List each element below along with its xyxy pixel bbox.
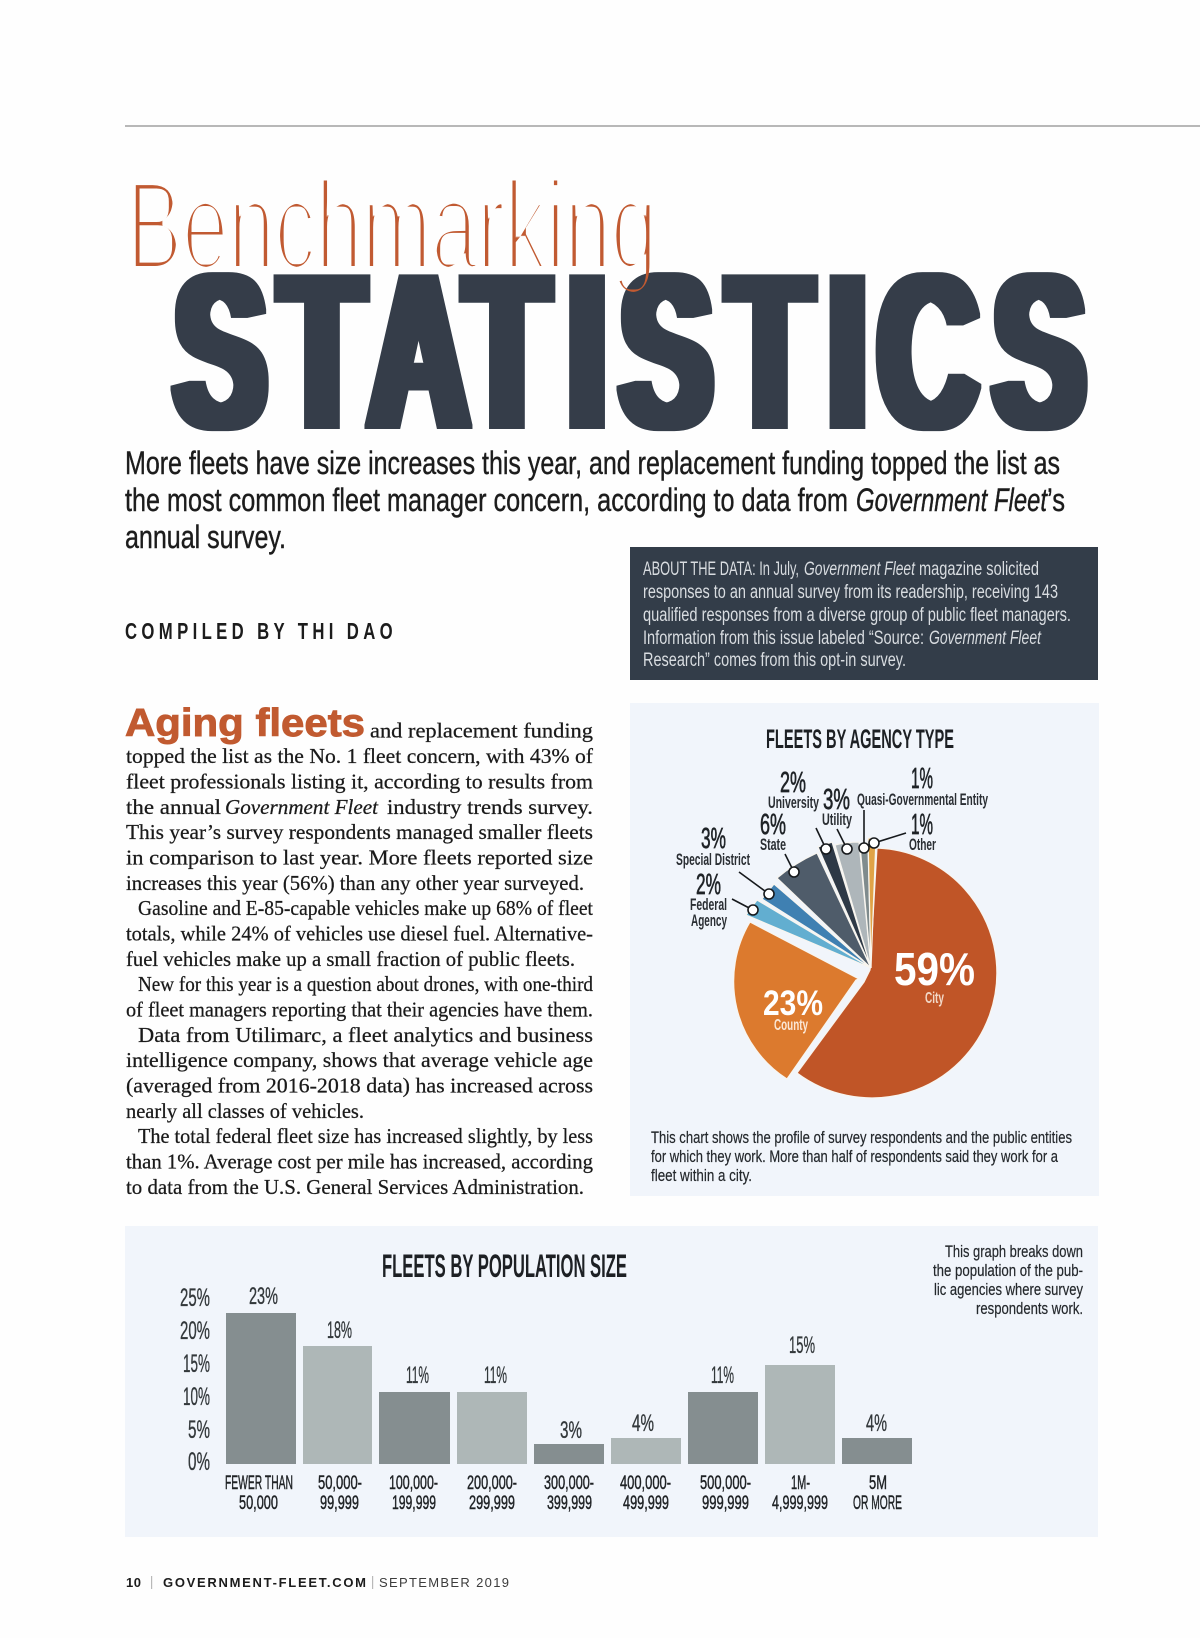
bar category labels: 1M- — [791, 1473, 810, 1494]
panel: about the data: Research” comes from this opt-in survey. — [643, 650, 906, 671]
byline: COMPILED BY THI DAO — [125, 618, 397, 644]
article text: Aging fleets: totals, while 24% of vehicles use diesel fuel. Alternative- — [126, 922, 593, 946]
intro paragraph: the most common fleet manager concern, according to data from — [125, 482, 848, 518]
label: university: University — [768, 793, 819, 812]
label: county 23%: 23% — [763, 984, 823, 1023]
label: county 23%: County — [774, 1017, 808, 1034]
y axis labels: 15% — [183, 1350, 210, 1378]
article text: Aging fleets: fleet professionals listing it, according to results from — [126, 770, 593, 794]
intro paragraph: ’s — [1047, 482, 1065, 518]
chart note — [933, 1242, 1083, 1318]
panel: about the data: Government Fleet — [804, 559, 916, 580]
label: utility: 3% — [823, 784, 850, 816]
article text: Aging fleets: and replacement funding — [370, 718, 593, 742]
bar category labels: 50,000 — [239, 1493, 278, 1514]
article text: Aging fleets: The total federal fleet size has increased slightly, by less — [138, 1124, 593, 1148]
bar value labels: 3% — [560, 1417, 582, 1444]
label: university: 2% — [780, 767, 806, 799]
panel: about the data: responses to an annual survey from its readership, receiving 143 — [643, 582, 1058, 603]
chart note: the population of the pub- — [933, 1261, 1083, 1280]
article text: Aging fleets: Government Fleet — [225, 795, 379, 819]
lead-in: Aging fleets: Aging fleets — [125, 702, 365, 745]
label: federal agency: Federal — [690, 895, 727, 914]
bar category labels: 199,999 — [392, 1493, 436, 1514]
bar category labels: FEWER THAN — [225, 1473, 293, 1494]
label: other — [909, 809, 936, 854]
label: quasi-governmental entity: 1% — [911, 763, 933, 795]
bar category labels: 399,999 — [547, 1493, 592, 1514]
label: city 59%: City — [925, 990, 944, 1007]
heading: STATISTICS: STATISTICS — [174, 229, 1085, 474]
intro paragraph — [125, 445, 1065, 555]
article text: Aging fleets: Gasoline and E-85-capable vehicles make up 68% of fleet — [138, 896, 593, 920]
article text: Aging fleets: to data from the U.S. General Services Administration. — [126, 1175, 584, 1199]
heading: Benchmarking: Benchmarking — [127, 155, 657, 296]
label: federal agency: 2% — [696, 869, 721, 901]
bar category labels: 400,000- — [620, 1473, 671, 1494]
footer — [126, 1575, 509, 1590]
bar category labels: 5M — [869, 1473, 887, 1494]
label: other: 1% — [911, 809, 933, 841]
panel: about the data: magazine solicited — [919, 559, 1039, 580]
bar category labels: 999,999 — [702, 1493, 749, 1514]
chart caption — [651, 1128, 1072, 1185]
y axis labels: 25% — [180, 1284, 210, 1312]
article text: Aging fleets: of fleet managers reporting that their agencies have them. — [126, 998, 593, 1022]
label: state: State — [760, 835, 786, 854]
bar value labels: 4% — [866, 1410, 887, 1437]
bar category labels: 200,000- — [467, 1473, 517, 1494]
y axis labels: 10% — [183, 1383, 210, 1411]
chart note: This graph breaks down — [945, 1242, 1083, 1261]
label: other: Other — [909, 835, 936, 854]
chart note: respondents work. — [976, 1299, 1083, 1318]
label: university — [768, 767, 819, 812]
article text: Aging fleets: in comparison to last year. More fleets reported size — [126, 846, 593, 870]
bar value labels: 18% — [327, 1317, 352, 1344]
article text: Aging fleets: fuel vehicles make up a small fraction of public fleets. — [126, 947, 575, 971]
label: state — [760, 809, 786, 854]
article text: Aging fleets: industry trends survey. — [387, 795, 593, 819]
bar value labels: 11% — [406, 1362, 429, 1389]
label: city 59%: 59% — [894, 943, 975, 995]
article text: Aging fleets: This year’s survey respondents managed smaller fleets — [126, 820, 593, 844]
bar value labels: 4% — [632, 1410, 654, 1437]
intro paragraph: annual survey. — [125, 519, 286, 555]
bar category labels: 50,000- — [318, 1473, 362, 1494]
chart title: FLEETS BY POPULATION SIZE — [382, 1248, 627, 1284]
bar value labels: 11% — [711, 1362, 734, 1389]
article text: Aging fleets: intelligence company, shows that average vehicle age — [126, 1048, 593, 1072]
bar category labels — [225, 1473, 902, 1514]
panel: fleets by population size — [125, 1226, 1098, 1537]
article text: Aging fleets: Data from Utilimarc, a fleet analytics and business — [138, 1023, 593, 1047]
label: quasi-governmental entity: Quasi-Governmental Entity — [857, 790, 988, 809]
y axis labels: 20% — [180, 1317, 210, 1345]
bar category labels: OR MORE — [853, 1493, 902, 1514]
pie chart — [734, 838, 997, 1098]
article text: Aging fleets: (averaged from 2016-2018 data) has increased across — [126, 1074, 593, 1098]
label: utility — [822, 784, 852, 829]
article text: Aging fleets: nearly all classes of vehicles. — [126, 1099, 364, 1123]
bar value labels: 11% — [484, 1362, 507, 1389]
label: quasi-governmental entity — [857, 763, 988, 809]
article text: Aging fleets: increases this year (56%) than any other year surveyed. — [126, 871, 584, 895]
label: county 23% — [763, 984, 823, 1034]
bar category labels: 299,999 — [469, 1493, 515, 1514]
panel: about the data: ABOUT THE DATA: In July, — [643, 559, 799, 580]
panel: about the data: Information from this issue labeled “Source: — [643, 628, 924, 649]
label: federal agency — [690, 869, 727, 930]
article text: Aging fleets — [125, 702, 594, 1199]
bar category labels: 500,000- — [700, 1473, 751, 1494]
bar category labels: 300,000- — [544, 1473, 594, 1494]
bars — [226, 1313, 912, 1464]
intro paragraph: Government Fleet — [856, 482, 1048, 518]
bar category labels: 4,999,999 — [772, 1493, 828, 1514]
article text: Aging fleets: than 1%. Average cost per mile has increased, according — [126, 1150, 593, 1174]
panel: about the data: Government Fleet — [929, 628, 1042, 649]
y axis labels — [180, 1284, 210, 1476]
chart caption: fleet within a city. — [651, 1166, 752, 1185]
label: federal agency: Agency — [691, 911, 727, 930]
footer: GOVERNMENT-FLEET.COM — [163, 1575, 366, 1590]
label: utility: Utility — [822, 810, 852, 829]
article text: Aging fleets: New for this year is a question about drones, with one-third — [138, 972, 593, 996]
bar value labels — [249, 1283, 887, 1444]
label: special district — [676, 823, 750, 869]
footer: 10 — [126, 1575, 141, 1590]
article text: Aging fleets: the annual — [126, 795, 221, 819]
footer: SEPTEMBER 2019 — [379, 1575, 509, 1590]
panel: about the data: qualified responses from a diverse group of public fleet managers. — [643, 605, 1071, 626]
bar value labels: 15% — [789, 1332, 815, 1359]
bar category labels: 99,999 — [320, 1493, 359, 1514]
leader lines and markers — [732, 810, 906, 915]
bar category labels: 499,999 — [623, 1493, 669, 1514]
y axis labels: 0% — [188, 1448, 210, 1476]
article text: Aging fleets: topped the list as the No. 1 fleet concern, with 43% of — [126, 744, 594, 768]
panel: about the data — [630, 547, 1098, 680]
label: state: 6% — [760, 809, 786, 841]
label: special district: 3% — [701, 823, 726, 855]
chart title: FLEETS BY AGENCY TYPE — [766, 724, 954, 754]
chart note: lic agencies where survey — [934, 1280, 1083, 1299]
bar value labels: 23% — [249, 1283, 278, 1310]
y axis labels: 5% — [188, 1416, 210, 1444]
chart caption: This chart shows the profile of survey respondents and the public entities — [651, 1128, 1072, 1147]
panel: fleets by agency type — [630, 703, 1099, 1196]
bar category labels: 100,000- — [389, 1473, 438, 1494]
chart caption: for which they work. More than half of respondents said they work for a — [651, 1147, 1058, 1166]
label: special district: Special District — [676, 850, 750, 869]
